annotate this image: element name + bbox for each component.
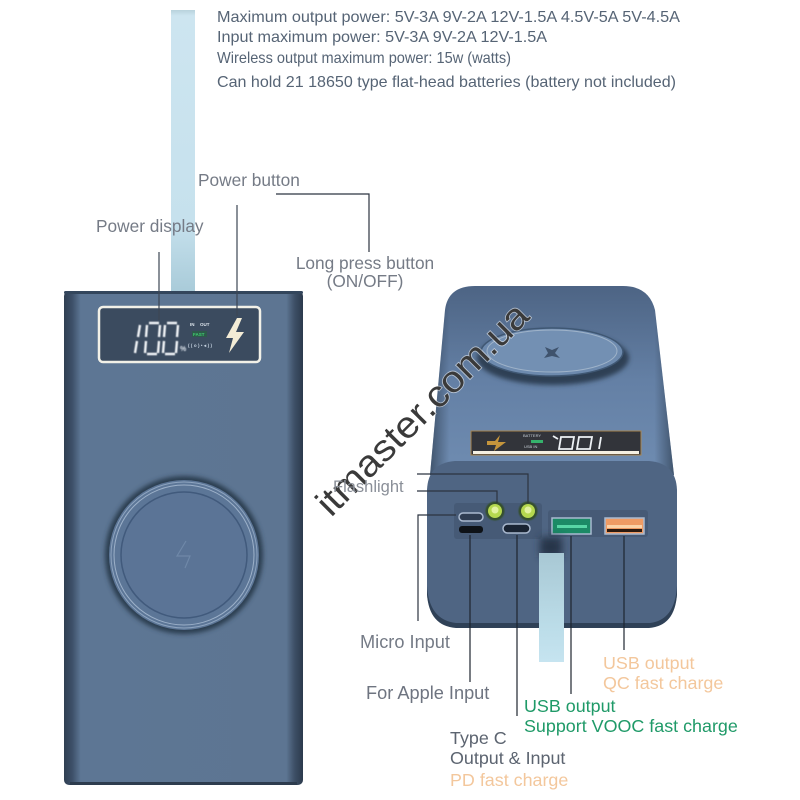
callout: usb output VOOC: USB output — [524, 696, 616, 716]
green USB port — [552, 518, 591, 534]
battery percentage readout — [135, 323, 187, 354]
port recess — [454, 503, 542, 539]
callout: usb output QC: USB output — [603, 653, 695, 673]
orange USB port — [605, 518, 644, 534]
ribbon: left pull tab — [171, 10, 195, 292]
callout: power button: Power button — [198, 170, 300, 190]
callout: usb output QC — [603, 536, 723, 693]
callout: type c — [450, 535, 568, 790]
callout: usb output VOOC: Support VOOC fast charge — [524, 716, 738, 736]
type c port — [503, 524, 530, 533]
callout: power display: Power display — [96, 216, 204, 236]
ribbon: end pull tab — [539, 553, 564, 662]
wireless pad — [477, 328, 629, 385]
micro input port — [459, 513, 483, 521]
display panel — [99, 307, 260, 362]
callout: type c: Type C — [450, 728, 507, 748]
specification text: Can hold 21 18650 type flat-head batteries (battery not included) — [217, 74, 676, 91]
status indicators: ((o)•◂)) — [188, 343, 212, 348]
status indicators — [188, 322, 212, 348]
wireless charging ring — [105, 476, 263, 634]
callout: micro input — [360, 515, 456, 652]
specification text — [217, 9, 680, 91]
mini status — [523, 433, 543, 449]
callout: type c: Output & Input — [450, 748, 565, 768]
mini status: USB IN — [524, 444, 537, 449]
callout: long press button — [276, 194, 434, 291]
flashlight LED right — [518, 502, 538, 520]
callout: usb output VOOC — [524, 536, 738, 736]
power bank: front view — [64, 291, 303, 785]
power bank: end view — [427, 286, 677, 662]
battery percentage readout: % — [180, 346, 187, 353]
flashlight LED left — [486, 502, 504, 520]
mirrored readout — [553, 436, 601, 449]
callout: flashlight: Flashlight — [333, 478, 404, 496]
callout: usb output QC: QC fast charge — [603, 673, 723, 693]
callout: micro input: Micro Input — [360, 632, 450, 652]
status indicators: FAST — [193, 332, 205, 337]
top face — [430, 286, 674, 475]
display strip — [471, 431, 641, 455]
icon: faint bolt — [177, 541, 190, 568]
status indicators: OUT — [200, 322, 210, 327]
callout: flashlight — [333, 474, 528, 503]
icon: small bolt — [487, 435, 506, 451]
callout: power display — [96, 216, 204, 320]
callout: type c: PD fast charge — [450, 770, 568, 790]
specification text: Wireless output maximum power: 15w (watts) — [217, 50, 511, 67]
callout: long press button: (ON/OFF) — [327, 271, 403, 291]
icon: wireless bolt — [544, 347, 560, 358]
specification text: Input maximum power: 5V-3A 9V-2A 12V-1.5A — [217, 29, 547, 46]
shadow above tab — [540, 537, 562, 557]
watermark: itmaster.com.ua — [308, 294, 537, 524]
apple input port — [459, 526, 483, 533]
callout: long press button: Long press button — [296, 253, 434, 273]
front face — [427, 461, 677, 624]
status indicators: IN — [190, 322, 194, 327]
mini status: BATTERY — [523, 433, 541, 438]
icon: lightning bolt — [226, 318, 244, 353]
callout: apple input: For Apple Input — [366, 683, 489, 703]
specification text: Maximum output power: 5V-3A 9V-2A 12V-1.5A 4.5V-5A 5V-4.5A — [217, 9, 680, 26]
